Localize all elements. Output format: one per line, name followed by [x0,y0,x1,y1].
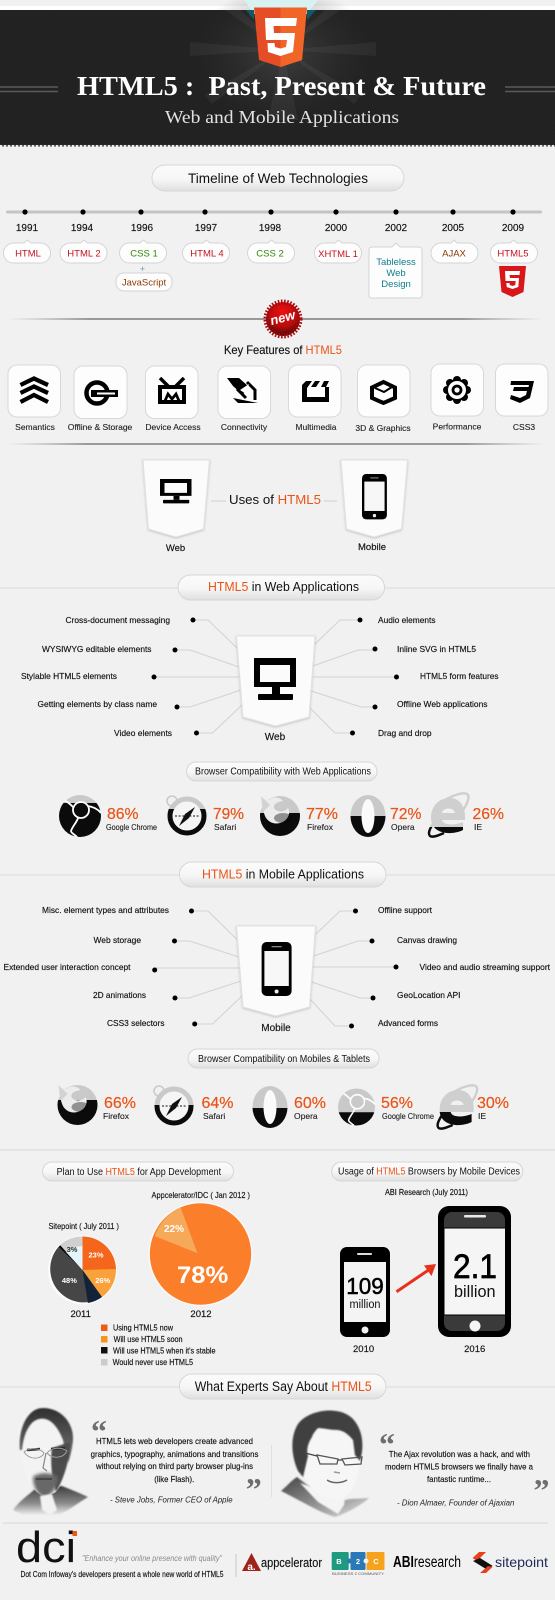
footer: dci branding [16,1523,224,1579]
stat: ie 26: IE [474,822,482,832]
stat: opera 60: 60% [294,1095,326,1112]
shield: web [143,460,210,554]
stat: safari 64: Safari [203,1111,225,1121]
heading: html5 in mobile applications [0,862,555,887]
quote: steve jobs: without relying on third party browser plug-ins [95,1461,253,1471]
logo: appcelerator: appcelerator [261,1555,323,1570]
card: offline and storage [68,366,133,432]
quote: dion almaer: “ [379,1426,395,1462]
legend [101,1324,216,1367]
labels: web features [21,615,498,738]
chart: pie 2011: 3% [67,1245,78,1254]
labels: web features: WYSIWYG editable elements [42,644,152,654]
timeline axis: 2005 [442,223,465,234]
stat: ie 30: 30% [477,1095,509,1112]
timeline tags: HTML 2 [67,248,101,260]
stat: firefox 66: 66% [104,1095,136,1112]
heading: key features: Key Features of HTML5 [224,343,342,357]
timeline tags: Tableless [376,257,416,268]
labels: mobile features: Offline support [378,905,433,915]
timeline axis: 2009 [502,223,525,234]
timeline axis: 1994 [71,223,94,234]
diagram: web application features [21,615,498,743]
stat: safari 79: 79% [213,806,244,823]
phone: 2016 [438,1206,511,1355]
stat: chrome 56: 56% [381,1095,413,1112]
card: css3: CSS3 [513,422,535,432]
stat: safari 64: 64% [202,1095,234,1112]
divider: features top [8,318,543,320]
logo: b2c: C [373,1557,379,1566]
stat: opera 72 [350,795,422,837]
quote: steve jobs: ” [246,1471,262,1507]
stat: safari 79: Safari [214,822,236,832]
chart: pie 2012: 78% [177,1262,228,1289]
phone: 2016: 2016 [464,1344,485,1355]
timeline tags: JavaScript [122,278,167,288]
stat: chrome 56: Google Chrome [382,1111,434,1121]
stat: chrome 86: Google Chrome [106,822,157,832]
shield: web: Web [166,543,185,554]
panel: plan to use html5 [42,1162,252,1367]
legend: Will use HTML5 soon [114,1335,183,1344]
logo: appcelerator: a. [247,1562,256,1573]
source: sitepoint: Sitepoint ( July 2011 ) [48,1221,119,1231]
stat: ie 26 [429,793,504,837]
labels: web features: Cross-document messaging [66,615,170,625]
heading: browser compatibility mobile: Browser Compatibility on Mobiles & Tablets [198,1054,370,1065]
labels: mobile features: GeoLocation API [397,990,460,1000]
quote: steve jobs: graphics, typography, animations and transitions [91,1449,258,1459]
title: HTML5 : Past, Present & Future [77,71,486,101]
shield: mobile: Mobile [261,1023,291,1034]
timeline tags: AJAX [442,248,467,260]
legend: Using HTML5 now [113,1324,173,1332]
card: semantics [8,365,60,432]
timeline tags: HTML 4 [190,248,224,260]
logo: b2c [332,1552,385,1576]
card: semantics: Semantics [15,422,55,432]
labels: mobile features: Misc. element types and attributes [42,905,169,915]
labels: web features: HTML5 form features [420,671,498,681]
labels: mobile features: CSS3 selectors [107,1018,164,1028]
chart: mobile browser support [58,1085,509,1129]
chart: pie 2012: 2012 [190,1309,212,1320]
heading: timeline: Timeline of Web Technologies [188,170,368,186]
phone: 2010: 2010 [353,1344,374,1355]
logo: sitepoint [473,1552,548,1573]
phone: 2010 [340,1247,390,1355]
labels: mobile features: Video and audio streaming support [420,962,551,972]
timeline axis: 2002 [385,223,408,234]
quote: dion almaer: The Ajax revolution was a hack, and with [389,1449,530,1459]
panel: uses of html5 [143,460,408,554]
timeline axis: 1996 [131,223,154,234]
card: 3d and graphics [355,365,411,433]
chart: pie 2012: 22% [164,1224,184,1235]
stat: safari 64 [154,1086,234,1123]
card: performance: Performance [433,422,482,432]
stat: firefox 77 [260,796,338,836]
legend: Would never use HTML5 [113,1358,194,1367]
timeline tags: HTML5 [497,248,529,260]
timeline tags: Design [381,279,411,290]
chart: web browser support [59,793,504,837]
stat: opera 72: 72% [390,806,422,823]
labels: mobile features: Advanced forms [378,1018,438,1028]
phone: 2010: million [350,1299,380,1311]
timeline tags: CSS 2 [256,248,284,260]
shield: mobile [236,926,316,1034]
divider: footer [3,1522,548,1524]
shield: mobile [341,460,408,553]
quote: steve jobs: (like Flash). [154,1474,194,1484]
footer: dci branding: Dot Com Infoway's developers present a whole new world of HTML5 [20,1570,224,1579]
panel: usage by mobile devices [332,1162,523,1355]
quote: dion almaer [379,1426,550,1508]
divider: lower section [0,1149,555,1151]
chart: pie 2012 [148,1202,252,1320]
footer: dci branding: "Enhance your online presence with quality" [82,1554,223,1563]
card: device access [145,366,201,432]
chart: pie 2011 [48,1236,117,1320]
stat: ie 30: IE [478,1111,486,1121]
timeline tags: + [140,264,145,274]
stat: ie 30 [438,1085,509,1129]
logo: b2c: B [336,1557,342,1566]
heading: plan to use [42,1162,234,1181]
quote: dion almaer: fantastic runtime... [427,1474,491,1484]
panel: key features [8,364,548,433]
icon: small html5 shield [499,266,526,297]
card: connectivity [218,366,270,432]
card: 3d and graphics: 3D & Graphics [355,423,411,433]
labels: mobile features [4,905,551,1028]
timeline axis: 1998 [259,223,282,234]
labels: mobile features: Web storage [94,935,141,945]
heading: what experts say [0,1374,555,1399]
html5 logo [244,0,318,67]
stat: firefox 77: 77% [306,806,338,823]
quote: dion almaer: - Dion Almaer, Founder of Ajaxian [397,1498,515,1508]
card: multimedia: Multimedia [295,422,337,432]
stat: safari 79 [167,796,244,833]
card: device access: Device Access [145,422,201,432]
stat: firefox 77: Firefox [307,822,334,832]
logo: sitepoint: sitepoint [495,1554,548,1570]
quote: dion almaer: ” [534,1472,550,1508]
source: appcelerator idc: Appcelerator/IDC ( Jan 2012 ) [152,1190,250,1200]
heading: plan to use: Plan to Use HTML5 for App Development [57,1167,221,1178]
stat: ie 26: 26% [472,806,504,823]
labels: web features: Offline Web applications [397,699,488,709]
subtitle: Web and Mobile Applications [165,107,399,127]
stat: chrome 56 [338,1089,434,1125]
timeline tags: XHTML 1 [318,249,358,260]
labels: mobile features: Canvas drawing [397,935,457,945]
timeline tags: Web [386,268,406,279]
divider: quotes [270,1445,272,1497]
phone: 2016: 2.1 [453,1248,497,1286]
card: connectivity: Connectivity [221,422,268,432]
logo: abi research: ABIresearch [393,1554,461,1571]
chart: pie 2011: 23% [88,1250,104,1260]
heading: what experts say: What Experts Say About HTML5 [195,1379,372,1394]
legend: Will use HTML5 when it's stable [113,1346,216,1356]
stat: chrome 86 [59,795,157,837]
stat: firefox 66 [58,1085,136,1125]
diagram: mobile application features [4,905,551,1034]
stat: firefox 66: Firefox [103,1111,130,1121]
timeline axis: 2000 [325,223,348,234]
heading: browser compatibility web: Browser Compatibility with Web Applications [195,766,371,778]
card: css3 [496,364,548,432]
portrait: dion almaer [281,1410,369,1517]
arrow: growth [396,1264,436,1292]
header banner [0,0,555,147]
labels: web features: Stylable HTML5 elements [21,671,117,681]
heading: usage [332,1162,523,1181]
quote: steve jobs: “ [91,1413,107,1449]
labels: mobile features: 2D animations [93,990,146,1000]
heading: browser compatibility mobile [188,1049,379,1068]
divider: footer vertical [235,1554,237,1577]
timeline tags: CSS 1 [130,248,158,260]
phone: 2010: 109 [346,1273,384,1299]
phone: 2016: billion [454,1282,496,1301]
heading: html5 in web applications [0,575,555,600]
labels: web features: Getting elements by class name [38,699,157,709]
chart: pie 2011: 48% [62,1276,77,1285]
labels: web features: Inline SVG in HTML5 [397,644,476,654]
labels: mobile features: Extended user interaction concept [4,962,131,972]
shield: web: Web [265,732,286,743]
source: abi research: ABI Research (July 2011) [385,1188,468,1197]
stat: opera 72: Opera [391,822,415,832]
quote: steve jobs: - Steve Jobs, Former CEO of Apple [110,1494,233,1504]
badge: new: new [268,307,298,328]
logo: b2c: 2 [356,1557,360,1566]
card: offline and storage: Offline & Storage [68,422,133,432]
timeline axis [6,209,542,234]
logo: appcelerator [242,1553,323,1573]
timeline axis: 1997 [195,223,218,234]
labels: web features: Audio elements [378,615,436,625]
labels: web features: Video elements [114,728,172,738]
stat: opera 60: Opera [294,1111,318,1121]
chart: pie 2011: 26% [95,1276,111,1285]
card: performance [431,364,484,432]
timeline tags [4,240,538,298]
divider: features bottom [7,443,545,445]
heading: browser compatibility web [186,762,377,781]
quote: dion almaer: modern HTML5 browsers we finally have a [385,1462,533,1472]
heading: html5 in web applications: HTML5 in Web Applications [208,579,359,594]
quote: steve jobs [91,1413,262,1507]
shield: web [236,636,315,743]
badge: new [266,302,300,336]
logo: b2c: BUSINESS 2 COMMUNITY [332,1572,385,1576]
labels: web features: Drag and drop [378,728,432,738]
quote: steve jobs: HTML5 lets web developers create advanced [96,1436,253,1446]
heading: usage: Usage of HTML5 Browsers by Mobile Devices [338,1166,520,1178]
shield: mobile: Mobile [358,542,386,553]
card: multimedia [288,365,341,432]
footer: dci branding: dci [16,1523,76,1572]
heading: html5 in mobile applications: HTML5 in Mobile Applications [202,866,364,882]
heading: uses of html5: Uses of HTML5 [229,492,321,507]
stat: opera 60 [252,1086,326,1128]
stat: chrome 86: 86% [107,806,138,823]
heading: timeline [152,165,404,191]
portrait: steve jobs [13,1408,88,1515]
timeline axis: 1991 [16,223,39,234]
timeline tags: HTML [15,248,41,260]
chart: pie 2011: 2011 [70,1309,91,1320]
